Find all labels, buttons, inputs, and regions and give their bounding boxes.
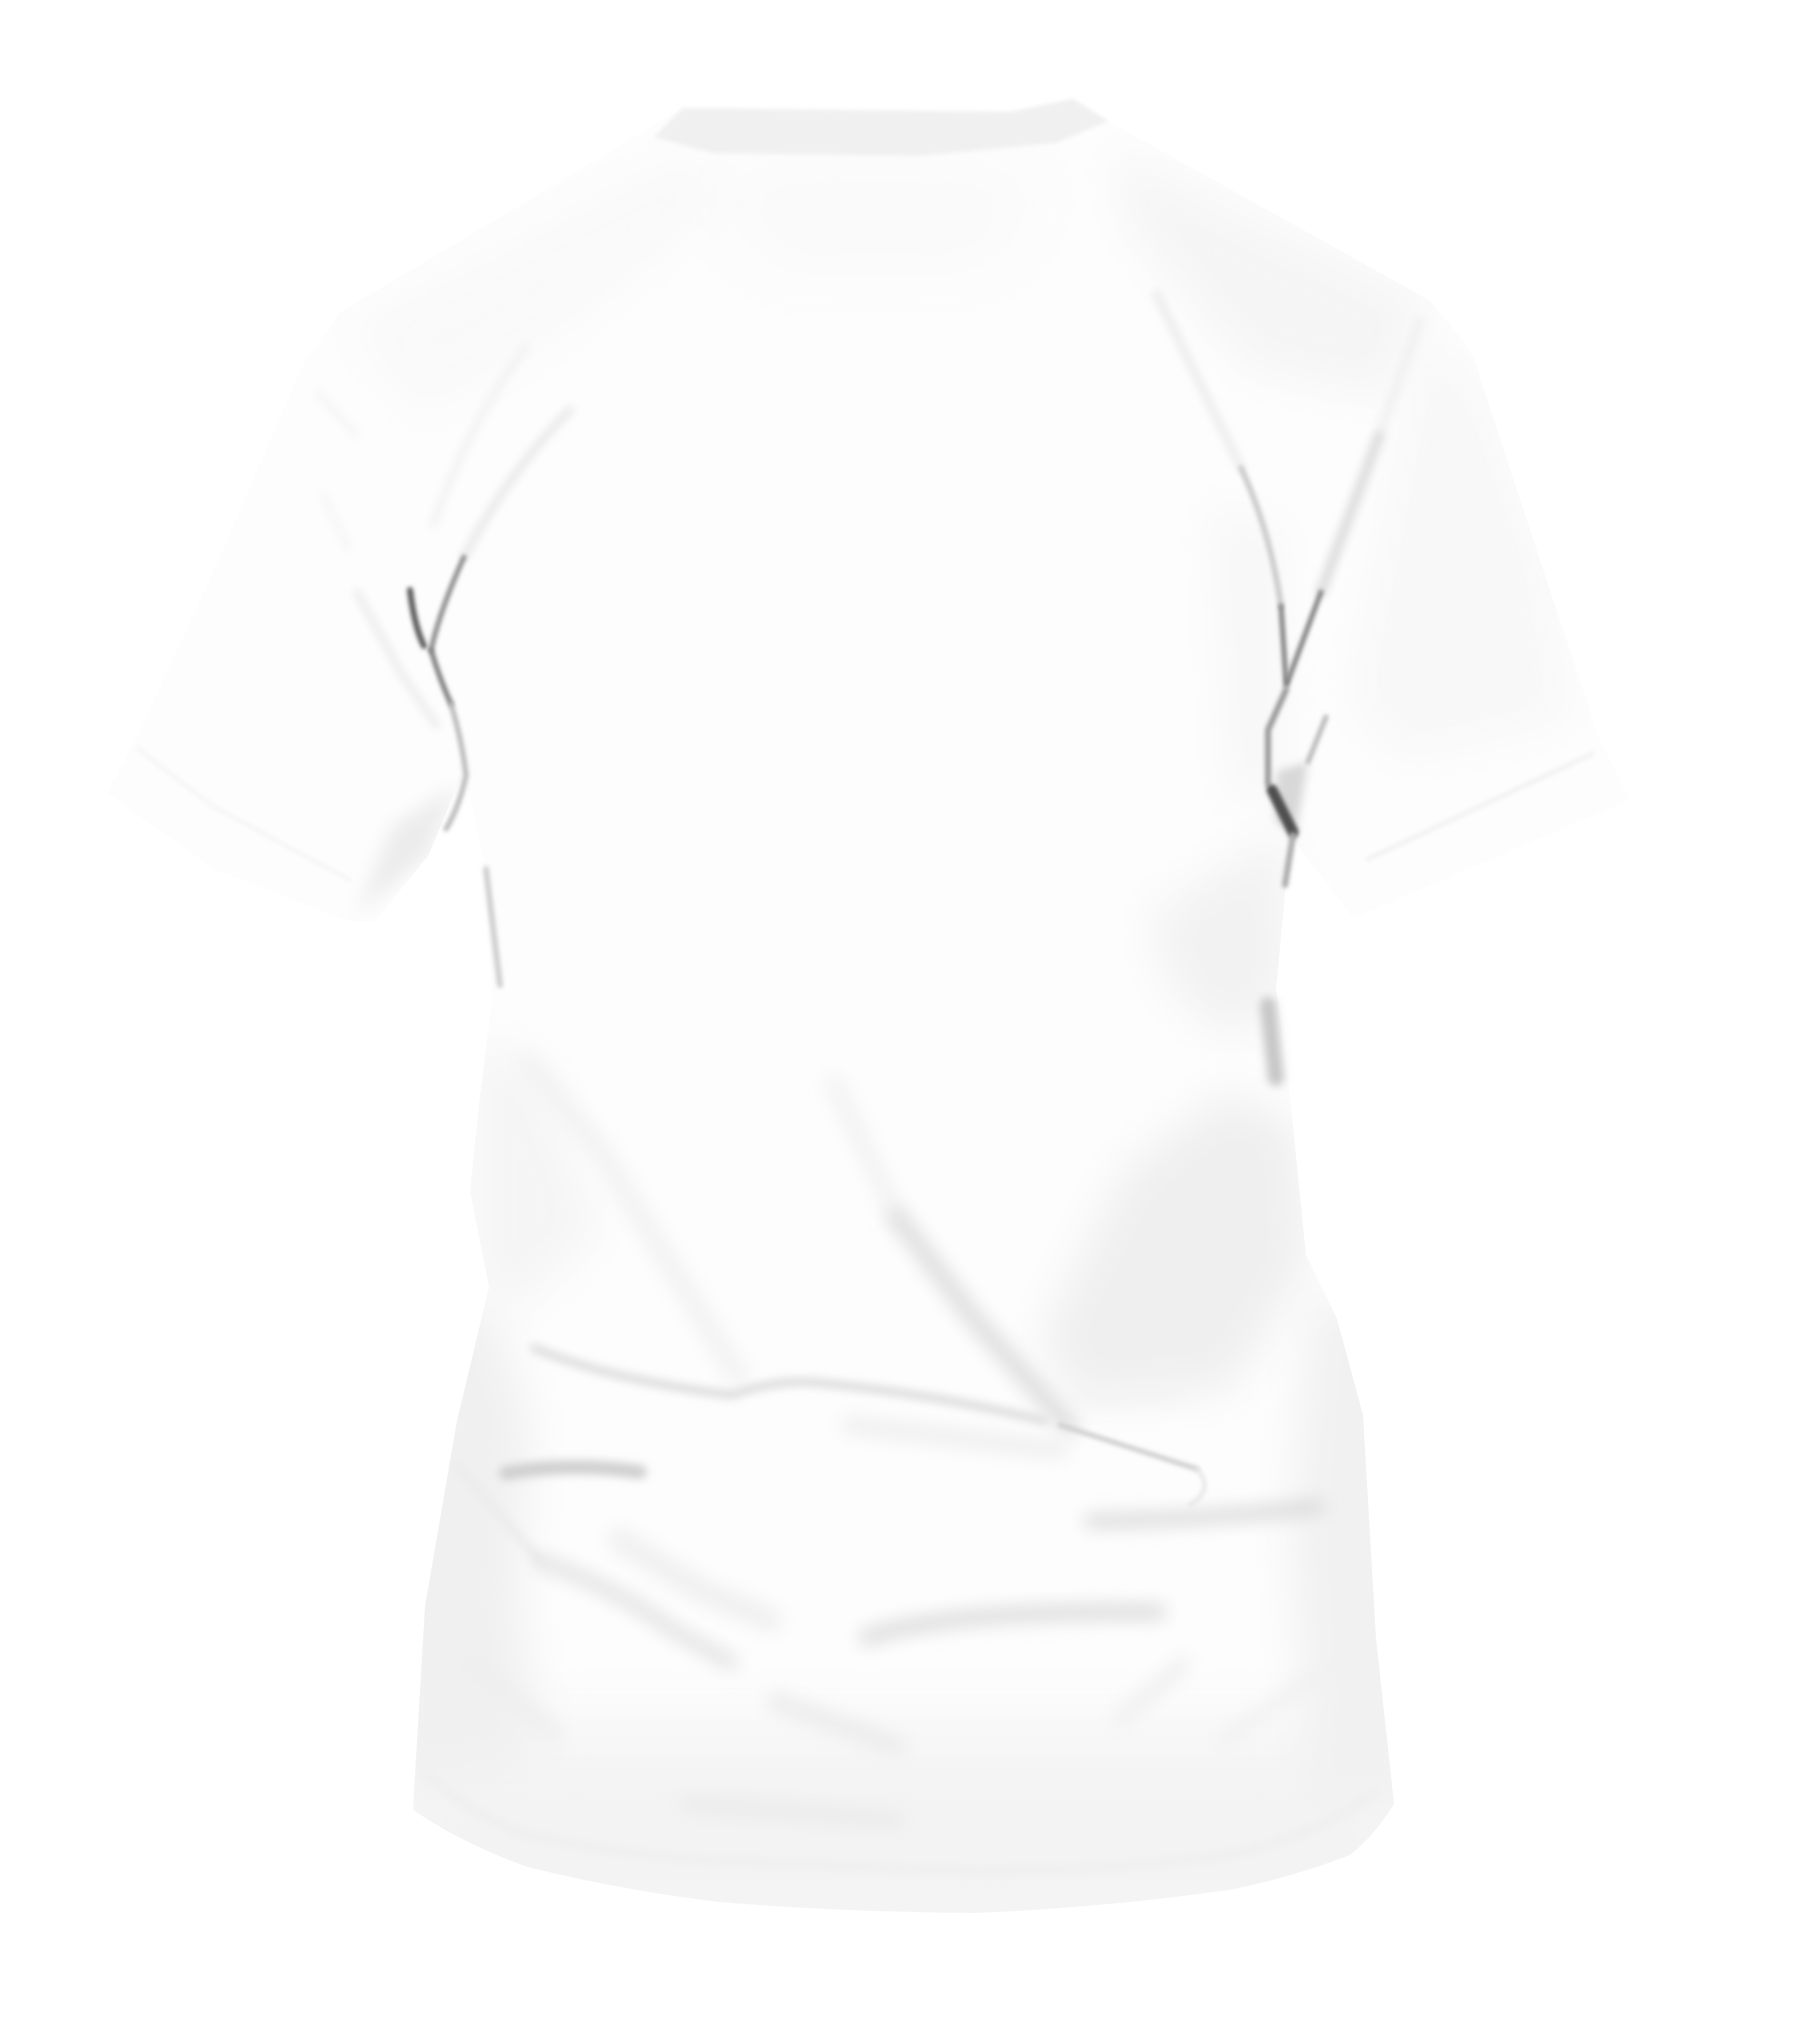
shirt silhouette — [107, 99, 1629, 1913]
soft shading on shirt — [369, 310, 1394, 1913]
shoulder shading — [345, 150, 730, 420]
right armpit patch — [1275, 762, 1308, 838]
lower right fold shading — [1055, 1107, 1302, 1386]
lower right side shading — [1302, 1316, 1384, 1725]
illustration: white t-shirt back view — [354, 100, 1592, 1913]
left waist shading — [470, 1040, 600, 1310]
left sleeve lower shading — [369, 798, 448, 896]
right body shading — [1172, 870, 1276, 1014]
lower creases — [425, 1064, 1376, 1871]
left sleeve creases — [138, 347, 571, 880]
lower left side shading — [418, 1324, 520, 1736]
left armpit shadow — [410, 557, 500, 985]
collar — [654, 99, 1108, 156]
hem shading — [420, 1767, 1374, 1913]
right armpit shadow — [1156, 293, 1420, 1078]
upper centre shading — [700, 165, 1050, 270]
right sleeve hem — [1366, 753, 1594, 860]
t-shirt — [354, 100, 1592, 1913]
right sleeve shading — [1350, 330, 1570, 760]
